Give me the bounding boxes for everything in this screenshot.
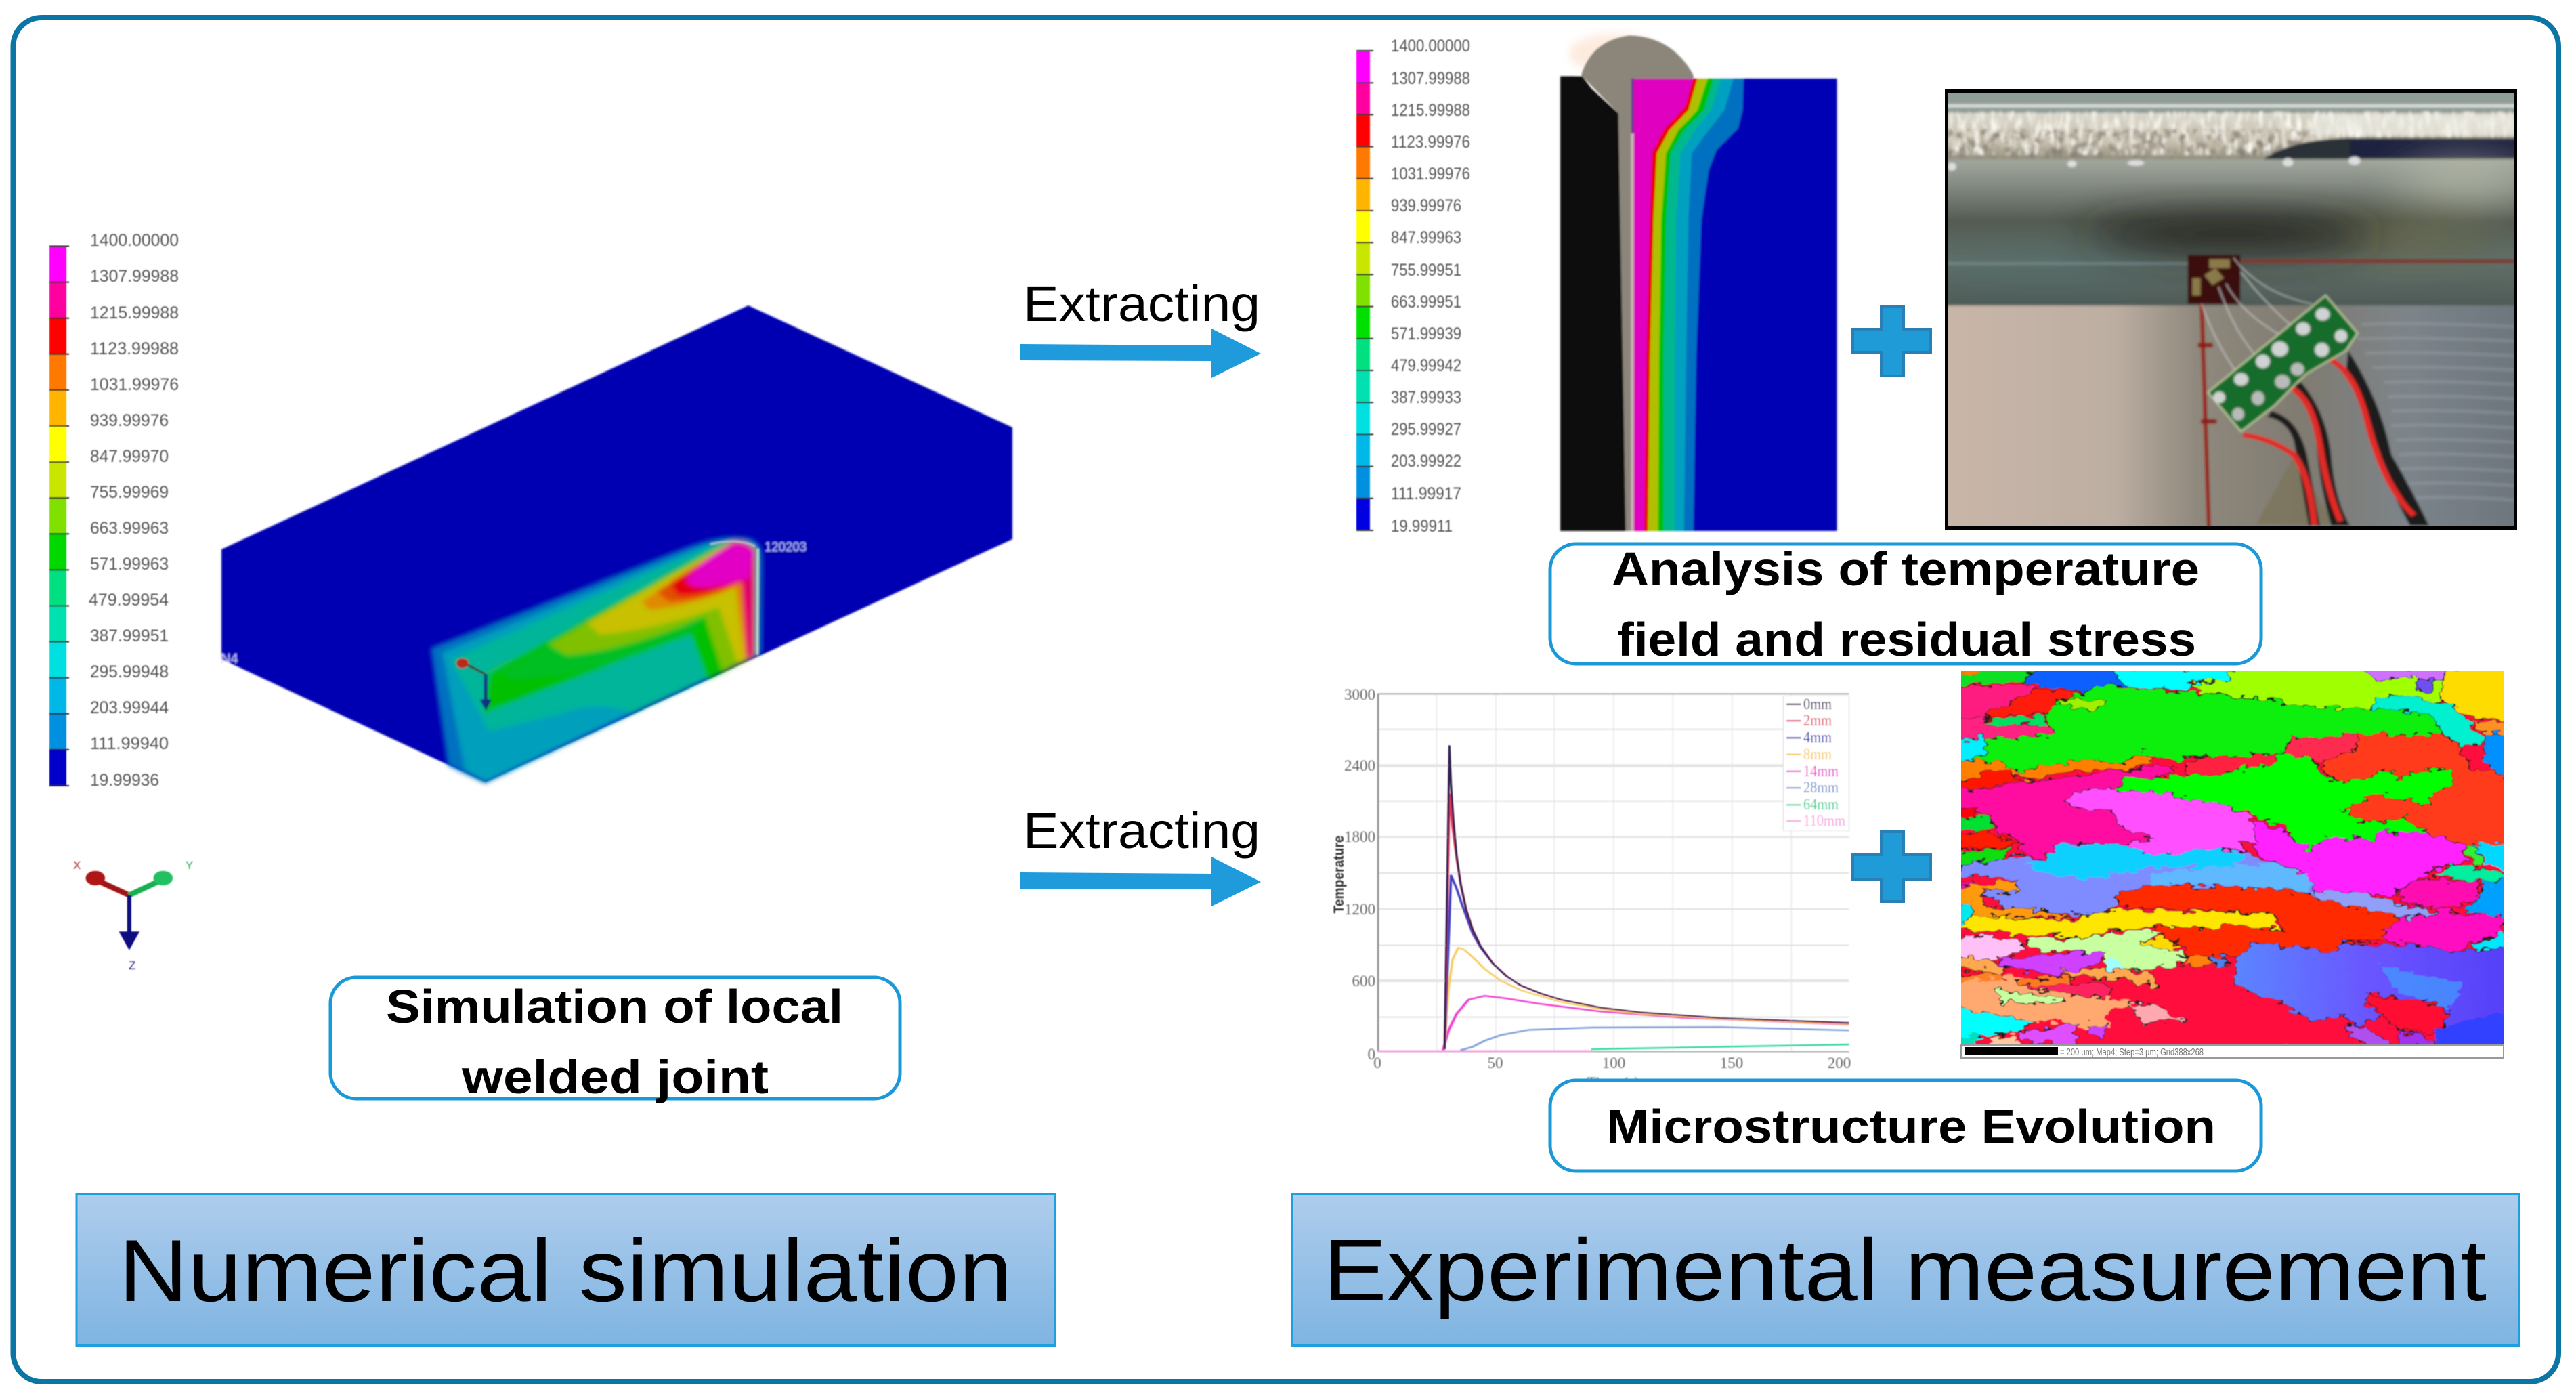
temperature colour legend for the cross-section: 1215.99988 <box>1391 101 1470 120</box>
axis triad icon <box>73 859 193 972</box>
temperature colour legend for the cross-section: 1307.99988 <box>1391 69 1470 88</box>
temperature colour legend for the cross-section: 1123.99976 <box>1391 133 1470 152</box>
temperature colour legend for the block: 387.99951 <box>90 627 169 645</box>
line chart: temperature vs time: 0mm <box>1803 696 1832 713</box>
plus sign icon (top) <box>1853 306 1931 376</box>
line chart: temperature vs time: 50 <box>1487 1055 1503 1072</box>
axis triad icon: Z <box>129 959 135 972</box>
line chart: temperature vs time: 2mm <box>1803 712 1832 729</box>
banner: numerical simulation <box>77 1195 1055 1345</box>
temperature colour legend for the cross-section: 847.99963 <box>1391 228 1461 247</box>
line chart: temperature vs time: 14mm <box>1803 763 1839 780</box>
temperature colour legend for the block: 1123.99988 <box>90 339 179 358</box>
line chart: temperature vs time: 600 <box>1352 973 1375 990</box>
axis triad icon: X <box>73 859 81 872</box>
label: simulation of local welded joint <box>330 977 900 1103</box>
temperature colour legend for the cross-section: 203.99922 <box>1391 452 1461 471</box>
arrow: extracting to temperature analysis <box>1020 276 1261 378</box>
line chart: temperature vs time: 1800 <box>1344 828 1375 845</box>
temperature colour legend for the block <box>49 231 179 790</box>
block body <box>221 305 1012 782</box>
temperature colour legend for the cross-section: 111.99917 <box>1391 484 1461 503</box>
line chart: temperature vs time: 200 <box>1828 1055 1851 1072</box>
banner: numerical simulation: Numerical simulation <box>119 1221 1012 1320</box>
temperature colour legend for the block: 1215.99988 <box>90 303 179 322</box>
line chart: temperature vs time <box>1331 686 1851 1091</box>
panel: numerical simulation <box>49 231 1055 1345</box>
temperature colour legend for the cross-section: 1031.99976 <box>1391 165 1470 184</box>
3D welded block model <box>221 305 1012 784</box>
line chart: temperature vs time: 4mm <box>1803 729 1832 746</box>
label: microstructure evolution <box>1550 1080 2261 1171</box>
node labels: N4 <box>221 652 238 666</box>
temperature colour legend for the cross-section: 939.99976 <box>1391 196 1461 215</box>
weld temperature contour face <box>431 537 763 784</box>
line chart: temperature vs time: 110mm <box>1803 812 1845 829</box>
temperature colour legend for the cross-section: 1400.00000 <box>1391 37 1470 56</box>
line chart: temperature vs time: 150 <box>1720 1055 1743 1072</box>
temperature colour legend for the block: 1307.99988 <box>90 267 179 286</box>
temperature colour legend for the block: 295.99948 <box>90 662 169 681</box>
label: analysis of temperature field and residual stress: field and residual stress <box>1617 613 2196 666</box>
temperature colour legend for the block: 847.99970 <box>90 447 169 466</box>
temperature colour legend for the block: 1031.99976 <box>90 375 179 394</box>
line chart: temperature vs time: 0 <box>1368 1046 1375 1063</box>
temperature colour legend for the cross-section: 571.99939 <box>1391 324 1461 343</box>
temperature colour legend for the cross-section: 663.99951 <box>1391 293 1461 312</box>
panel: experimental measurement <box>1292 34 2527 1345</box>
arrow: extracting to temperature analysis: Extracting <box>1023 276 1260 332</box>
temperature colour legend for the block: 203.99944 <box>90 698 169 717</box>
axis triad icon: Y <box>186 859 193 872</box>
label: analysis of temperature field and residual stress <box>1550 543 2261 666</box>
temperature colour legend for the block: 755.99969 <box>90 483 169 502</box>
photo: strain gauge on welded plate <box>1937 81 2527 537</box>
weld toe line and local axes <box>456 541 758 711</box>
temperature colour legend for the cross-section: 387.99933 <box>1391 388 1461 407</box>
line chart: temperature vs time: 28mm <box>1803 779 1839 796</box>
node labels <box>221 540 807 666</box>
line chart: temperature vs time: 8mm <box>1803 746 1832 763</box>
banner: experimental measurement <box>1292 1195 2519 1345</box>
label: analysis of temperature field and residual stress: Analysis of temperature <box>1612 543 2199 595</box>
temperature colour legend for the cross-section: 479.99942 <box>1391 356 1461 375</box>
label: microstructure evolution: Microstructure Evolution <box>1606 1100 2216 1153</box>
temperature colour legend for the cross-section: 755.99951 <box>1391 261 1461 280</box>
line chart: temperature vs time: Time (s) <box>1587 1074 1639 1091</box>
label: simulation of local welded joint: welded joint <box>461 1051 769 1103</box>
line chart: temperature vs time: 2400 <box>1344 757 1375 774</box>
temperature colour legend for the block: 571.99963 <box>90 555 169 574</box>
line chart: temperature vs time: 0 <box>1373 1055 1381 1072</box>
temperature colour legend for the block: 1400.00000 <box>90 231 179 250</box>
label: simulation of local welded joint: Simulation of local <box>386 980 843 1033</box>
node labels: 120203 <box>765 540 807 555</box>
line chart: temperature vs time: 1200 <box>1344 901 1375 918</box>
temperature colour legend for the cross-section <box>1356 37 1470 536</box>
EBSD grain orientation map: = 200 µm; Map4; Step=3 µm; Grid388x268 <box>2060 1046 2204 1058</box>
line chart: temperature vs time: 3000 <box>1344 686 1375 703</box>
line chart: temperature vs time: Temperature <box>1331 836 1347 913</box>
line chart: temperature vs time: 100 <box>1602 1055 1625 1072</box>
weld cross-section with temperature contour overlay <box>1560 34 1837 531</box>
banner: experimental measurement: Experimental measurement <box>1323 1221 2487 1319</box>
temperature colour legend for the block: 939.99976 <box>90 411 169 430</box>
arrow: extracting to microstructure: Extracting <box>1023 803 1260 859</box>
plus sign icon (bottom) <box>1853 832 1931 902</box>
EBSD grain orientation map <box>1957 668 2508 1058</box>
line chart: temperature vs time: 64mm <box>1803 796 1839 813</box>
temperature colour legend for the cross-section: 19.99911 <box>1391 517 1453 536</box>
temperature colour legend for the cross-section: 295.99927 <box>1391 420 1461 439</box>
temperature colour legend for the block: 19.99936 <box>90 771 159 790</box>
temperature colour legend for the block: 111.99940 <box>90 734 169 753</box>
temperature colour legend for the block: 663.99963 <box>90 519 169 538</box>
arrow: extracting to microstructure <box>1020 803 1261 906</box>
temperature colour legend for the block: 479.99954 <box>89 591 169 610</box>
